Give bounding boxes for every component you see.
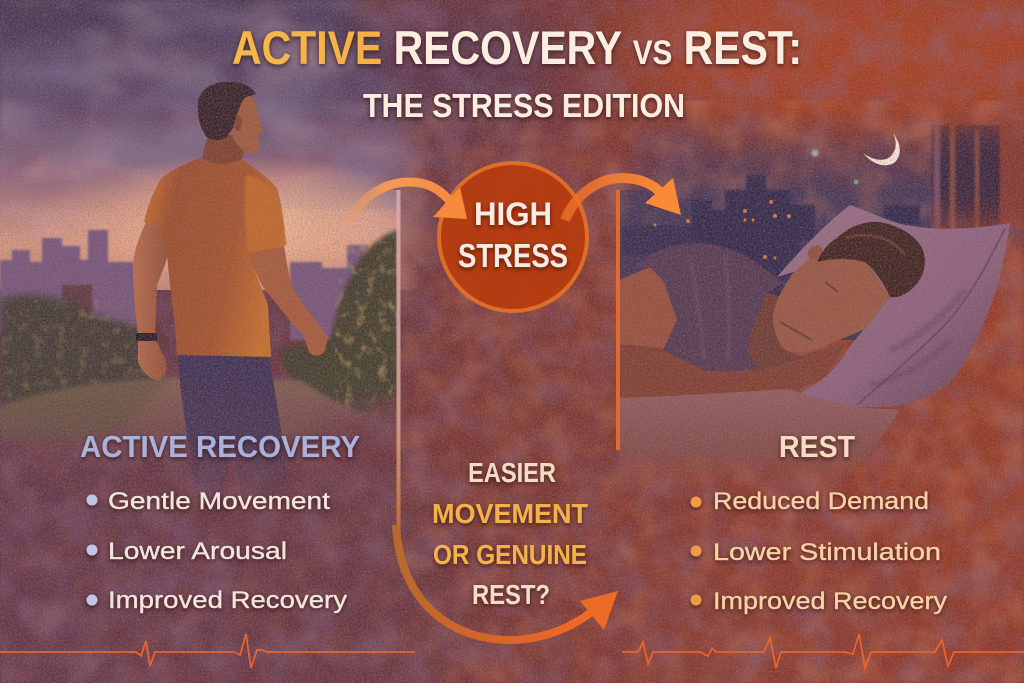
hair xyxy=(817,222,925,297)
face xyxy=(232,92,263,154)
heading: rest: REST xyxy=(779,429,855,464)
center question: OR GENUINE xyxy=(433,539,587,570)
title: ACTIVE RECOVERY VS REST: xyxy=(232,21,802,74)
list: rest xyxy=(690,488,947,615)
face xyxy=(773,252,890,353)
list: rest: Reduced Demand xyxy=(713,488,929,515)
center question: EASIER xyxy=(468,457,556,488)
list: rest: Lower Stimulation xyxy=(713,539,941,566)
ear xyxy=(234,115,242,131)
center question: MOVEMENT xyxy=(432,498,588,529)
pillow xyxy=(777,205,1010,407)
title xyxy=(232,21,802,124)
right arm xyxy=(247,246,328,356)
center question xyxy=(432,457,588,610)
list: active recovery xyxy=(86,488,347,614)
heading: active recovery: ACTIVE RECOVERY xyxy=(80,429,360,464)
foliage xyxy=(0,295,160,405)
high stress badge: HIGH xyxy=(474,196,552,232)
list: rest: Improved Recovery xyxy=(713,588,947,615)
blanket xyxy=(619,385,900,490)
list: active recovery: Improved Recovery xyxy=(108,587,347,614)
title: THE STRESS EDITION xyxy=(363,87,685,124)
scene: walking in the city at dusk xyxy=(0,0,426,446)
hair xyxy=(198,82,256,140)
torso xyxy=(144,158,286,357)
path xyxy=(0,376,374,446)
neck xyxy=(745,290,805,372)
t-shirt xyxy=(630,243,783,371)
arrow: out of stress xyxy=(565,178,681,220)
upper arm xyxy=(619,267,677,348)
panel divider lines xyxy=(396,190,620,535)
lower arm xyxy=(619,345,845,398)
list: active recovery: Gentle Movement xyxy=(108,488,330,515)
moon xyxy=(863,133,900,165)
high stress badge: STRESS xyxy=(458,237,568,274)
watch xyxy=(136,333,157,341)
legs xyxy=(178,355,290,510)
arrow: lower curved xyxy=(396,525,618,640)
man walking xyxy=(133,82,328,510)
scene: sleeping at night xyxy=(619,110,1024,490)
neck xyxy=(202,135,245,164)
center question: REST? xyxy=(472,579,550,610)
heartbeat line: left xyxy=(0,634,415,668)
curtains xyxy=(932,120,1024,230)
skyline xyxy=(0,230,398,340)
city lights xyxy=(654,200,791,260)
left arm xyxy=(133,222,168,380)
night skyline xyxy=(622,175,920,300)
list: active recovery: Lower Arousal xyxy=(108,538,287,565)
high stress badge xyxy=(439,163,587,311)
arrow: into stress xyxy=(346,182,467,225)
heartbeat line: right xyxy=(622,634,1024,668)
